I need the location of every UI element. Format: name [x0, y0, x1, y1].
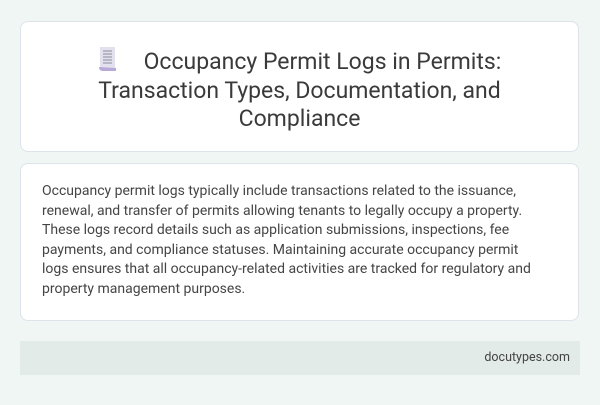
text block: description: property management purposes. [42, 280, 245, 296]
text block: description: These logs record details such as application submissions, inspections, fee [42, 222, 509, 238]
footer: docutypes.com [484, 350, 570, 365]
text block: description: logs ensures that all occupancy-related activities are tracked for regulatory and [42, 261, 531, 277]
title [98, 47, 501, 132]
panel: title card [20, 21, 579, 152]
title: Transaction Types, Documentation, and [98, 76, 501, 104]
panel: description [20, 163, 579, 321]
title: Occupancy Permit Logs in Permits: [144, 48, 501, 75]
footer [20, 341, 580, 375]
text block: description: payments, and compliance statuses. Maintaining accurate occupancy permit [42, 242, 518, 258]
text block: description [42, 183, 531, 296]
icon: receipt [99, 47, 116, 71]
text block: description: Occupancy permit logs typically include transactions related to the issuance, [42, 183, 516, 199]
text block: description: renewal, and transfer of permits allowing tenants to legally occupy a property. [42, 202, 522, 218]
title: Compliance [239, 105, 360, 132]
